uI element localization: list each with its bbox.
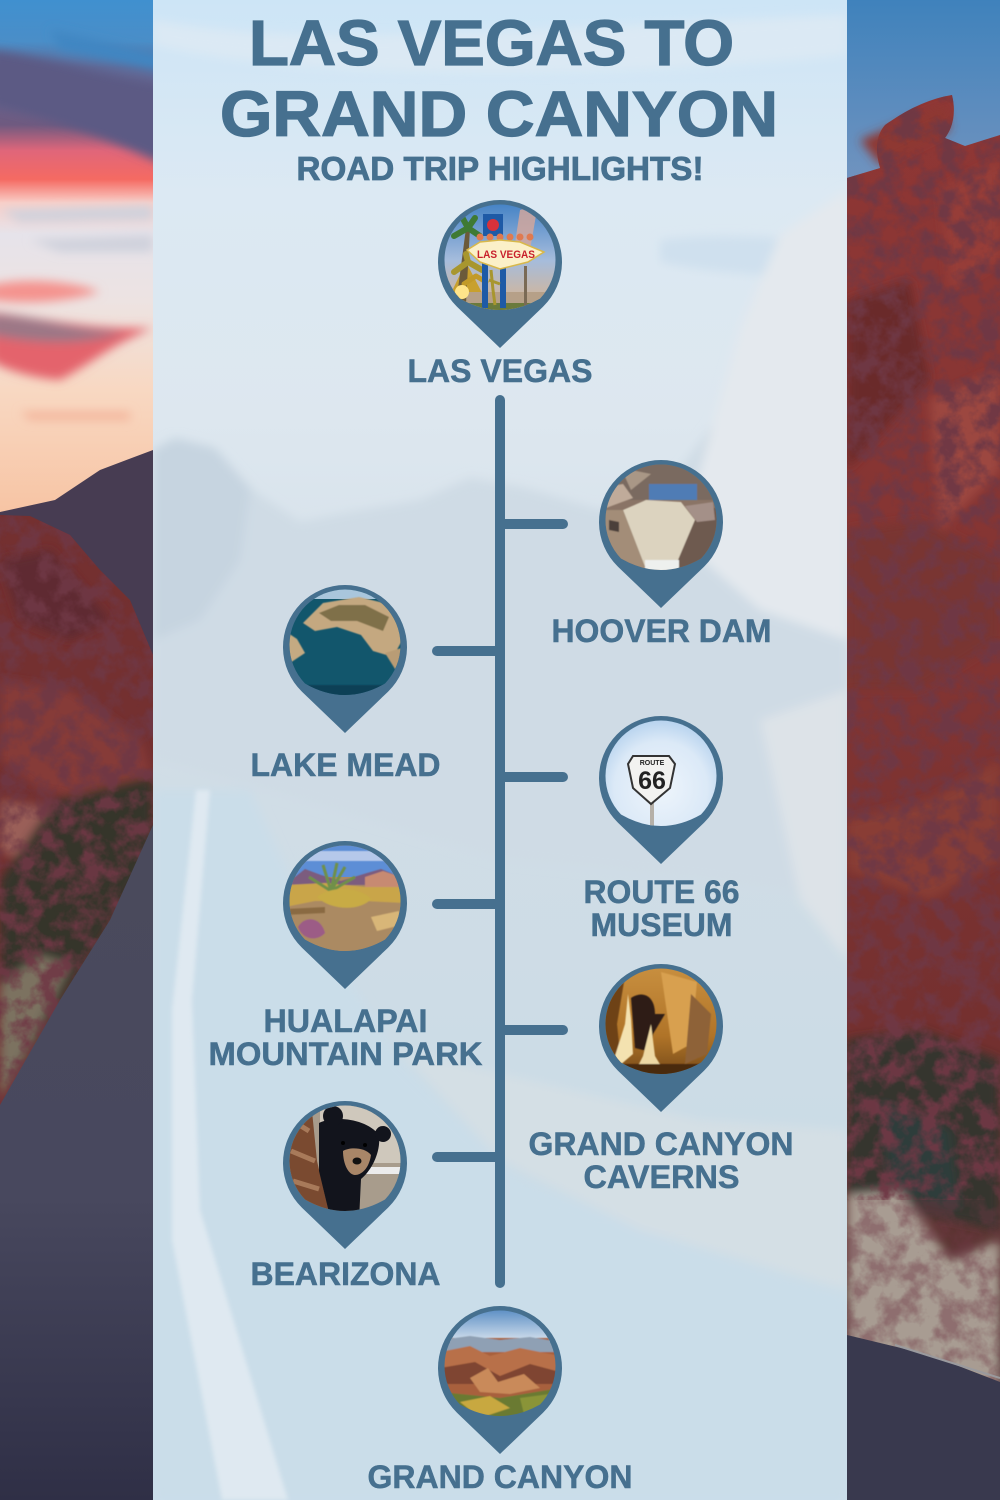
label: Lake Mead: LAKE MEAD: [250, 747, 440, 783]
label: Grand Canyon Caverns: CAVERNS: [584, 1159, 740, 1195]
title: LAS VEGAS TO: [249, 7, 734, 79]
label: Hoover Dam: HOOVER DAM: [552, 613, 772, 649]
pin: Hualapai Mountain Park: [283, 841, 407, 989]
label: Route 66 Museum: MUSEUM: [590, 907, 732, 943]
label: Bearizona: BEARIZONA: [250, 1256, 440, 1292]
background photo: right strip with sky, red rocks, grass and road: [847, 0, 1000, 1500]
pin: Grand Canyon Caverns: [599, 964, 723, 1112]
pin: Bearizona: [283, 1101, 407, 1249]
label: Grand Canyon Caverns: [528, 1126, 794, 1195]
pin: Las Vegas: [438, 200, 562, 348]
pin: Route 66 Museum: ROUTE: [640, 760, 665, 767]
label: Grand Canyon: GRAND CANYON: [368, 1459, 632, 1495]
label: Route 66 Museum: [584, 874, 740, 943]
pin: Grand Canyon: [438, 1306, 562, 1454]
label: Las Vegas: LAS VEGAS: [408, 353, 592, 389]
title: GRAND CANYON: [220, 78, 778, 150]
pin: Las Vegas: LAS VEGAS: [477, 249, 535, 261]
label: Grand Canyon Caverns: GRAND CANYON: [528, 1126, 794, 1162]
title: [220, 7, 778, 150]
pin: Route 66 Museum: 66: [638, 767, 666, 795]
background photo: left strip with sunset sky, rocks and road: [0, 0, 165, 1500]
label: Hualapai Mountain Park: [208, 1003, 482, 1072]
route timeline with branches: [432, 395, 568, 1288]
subtitle: ROAD TRIP HIGHLIGHTS!: [296, 150, 704, 187]
label: Hualapai Mountain Park: HUALAPAI: [264, 1003, 428, 1039]
pin: Lake Mead: [283, 585, 407, 733]
translucent panel with ghosted mountains and road: [153, 0, 847, 1500]
label: Route 66 Museum: ROUTE 66: [584, 874, 740, 910]
pin: Hoover Dam: [599, 460, 723, 608]
label: Hualapai Mountain Park: MOUNTAIN PARK: [208, 1036, 482, 1072]
pin: Route 66 Museum: [599, 716, 723, 864]
